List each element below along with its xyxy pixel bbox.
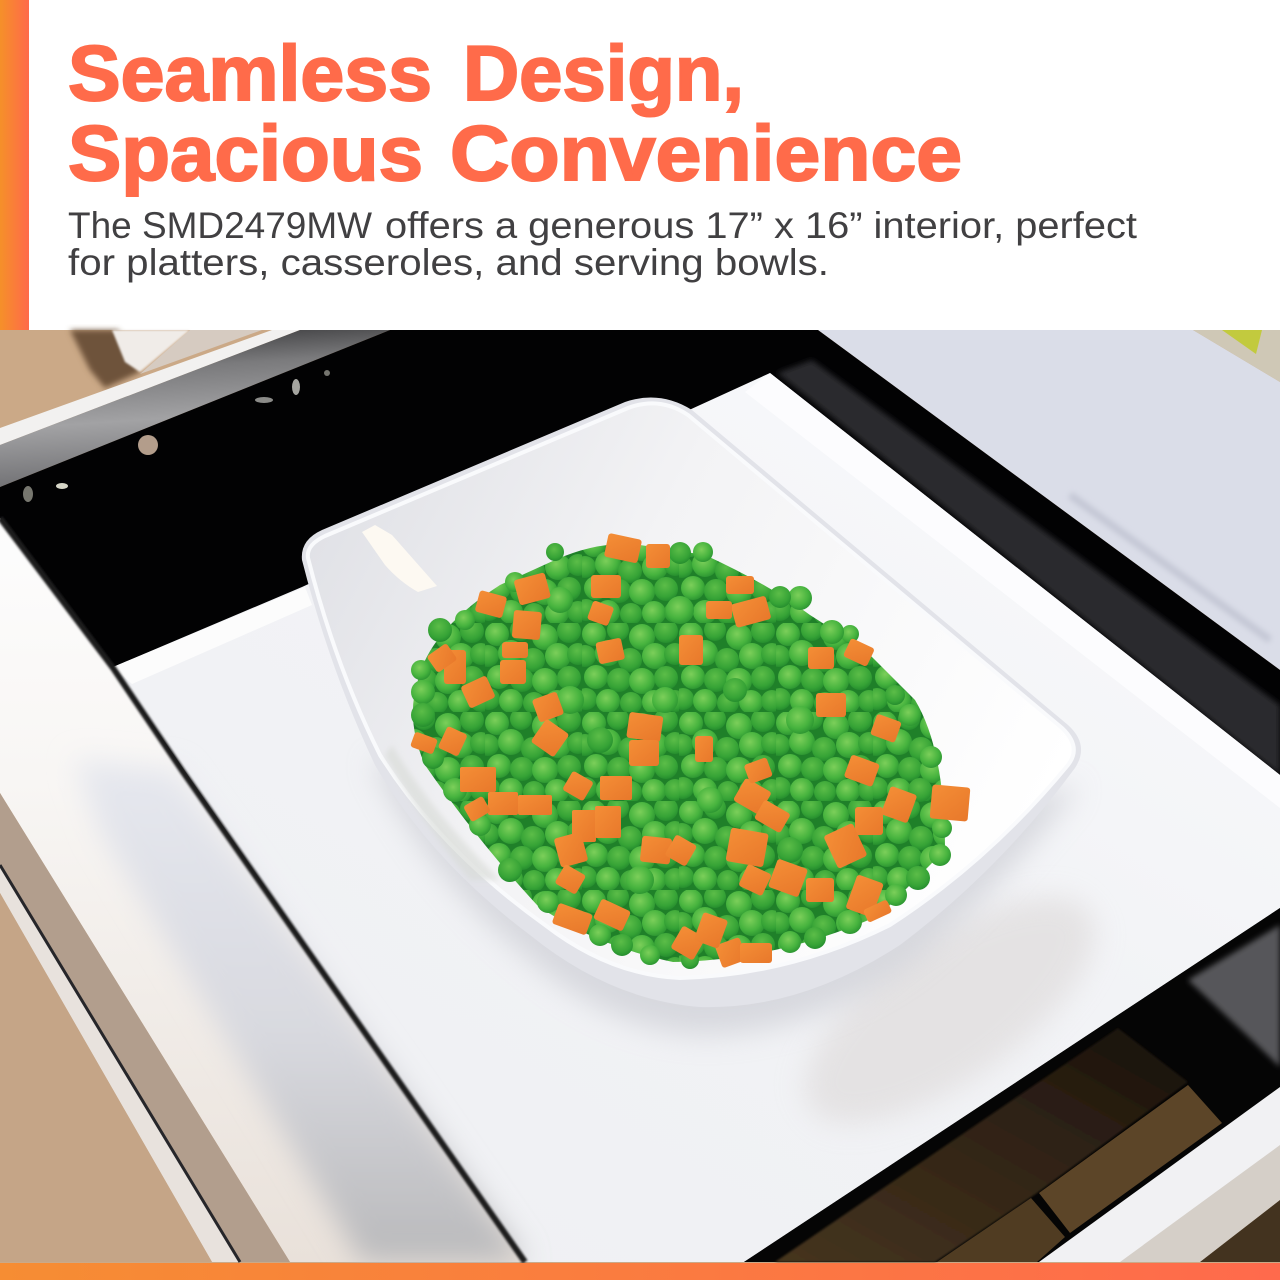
brown panel three — [937, 1198, 1065, 1262]
subtitle: offers a generous 17” x 16” interior, perfect — [385, 205, 1138, 246]
left accent bar — [0, 0, 29, 330]
title: Convenience — [450, 109, 962, 197]
white back object — [112, 330, 190, 372]
white drawer front — [1039, 1087, 1280, 1262]
title — [68, 29, 962, 197]
tray raised border top-left — [113, 587, 312, 684]
right interior panel — [818, 330, 1280, 670]
bowl — [302, 398, 1081, 1007]
subtitle — [68, 205, 1138, 283]
lower wood floor — [0, 893, 212, 1262]
tray warm shading — [771, 855, 1129, 1165]
title: Design, — [463, 29, 744, 117]
drawer rim highlight — [0, 330, 300, 445]
edge peas — [411, 542, 952, 969]
blurred dark wood patch — [70, 330, 140, 388]
drawer rim — [0, 330, 390, 487]
faint panel marking — [1070, 495, 1270, 640]
frame inner dark edge — [0, 518, 525, 1262]
header panel — [0, 0, 1280, 330]
right dark strip — [777, 360, 1280, 775]
lower right dark band — [744, 908, 1280, 1262]
carrots — [410, 533, 970, 968]
brown panel two — [1039, 1085, 1222, 1233]
tan band — [0, 793, 290, 1262]
brown panel one — [775, 1028, 1188, 1262]
sticker corner — [1193, 330, 1280, 382]
bowl highlight — [362, 525, 437, 592]
white drawer frame left — [0, 518, 525, 1262]
title: Spacious — [68, 109, 423, 197]
bowl shadow — [370, 760, 1080, 1035]
peas — [411, 542, 952, 969]
gray bar top right — [1188, 925, 1280, 1067]
cavity holes — [23, 370, 330, 502]
white tray — [113, 373, 1280, 1262]
frame shading — [75, 760, 525, 1262]
photo background: wood — [0, 330, 1280, 1263]
bowl outer wall — [302, 398, 1081, 1007]
black cavity — [0, 330, 1280, 1262]
title: Seamless — [68, 29, 432, 117]
bottom right corner — [1200, 1200, 1280, 1262]
beige back object — [140, 330, 262, 374]
white strip — [0, 867, 240, 1262]
subtitle: The SMD2479MW — [68, 205, 372, 246]
pea mass — [413, 544, 945, 962]
bowl interior — [308, 403, 1074, 978]
bottom accent bar — [0, 1263, 1280, 1280]
subtitle: for platters, casseroles, and serving bowls. — [68, 242, 829, 283]
drawer front lower shading — [1120, 1145, 1280, 1262]
photo: microwave drawer — [0, 330, 1280, 1263]
tray raised border right — [745, 373, 1280, 808]
black seam — [0, 865, 240, 1262]
bowl glass reflection — [385, 745, 500, 880]
